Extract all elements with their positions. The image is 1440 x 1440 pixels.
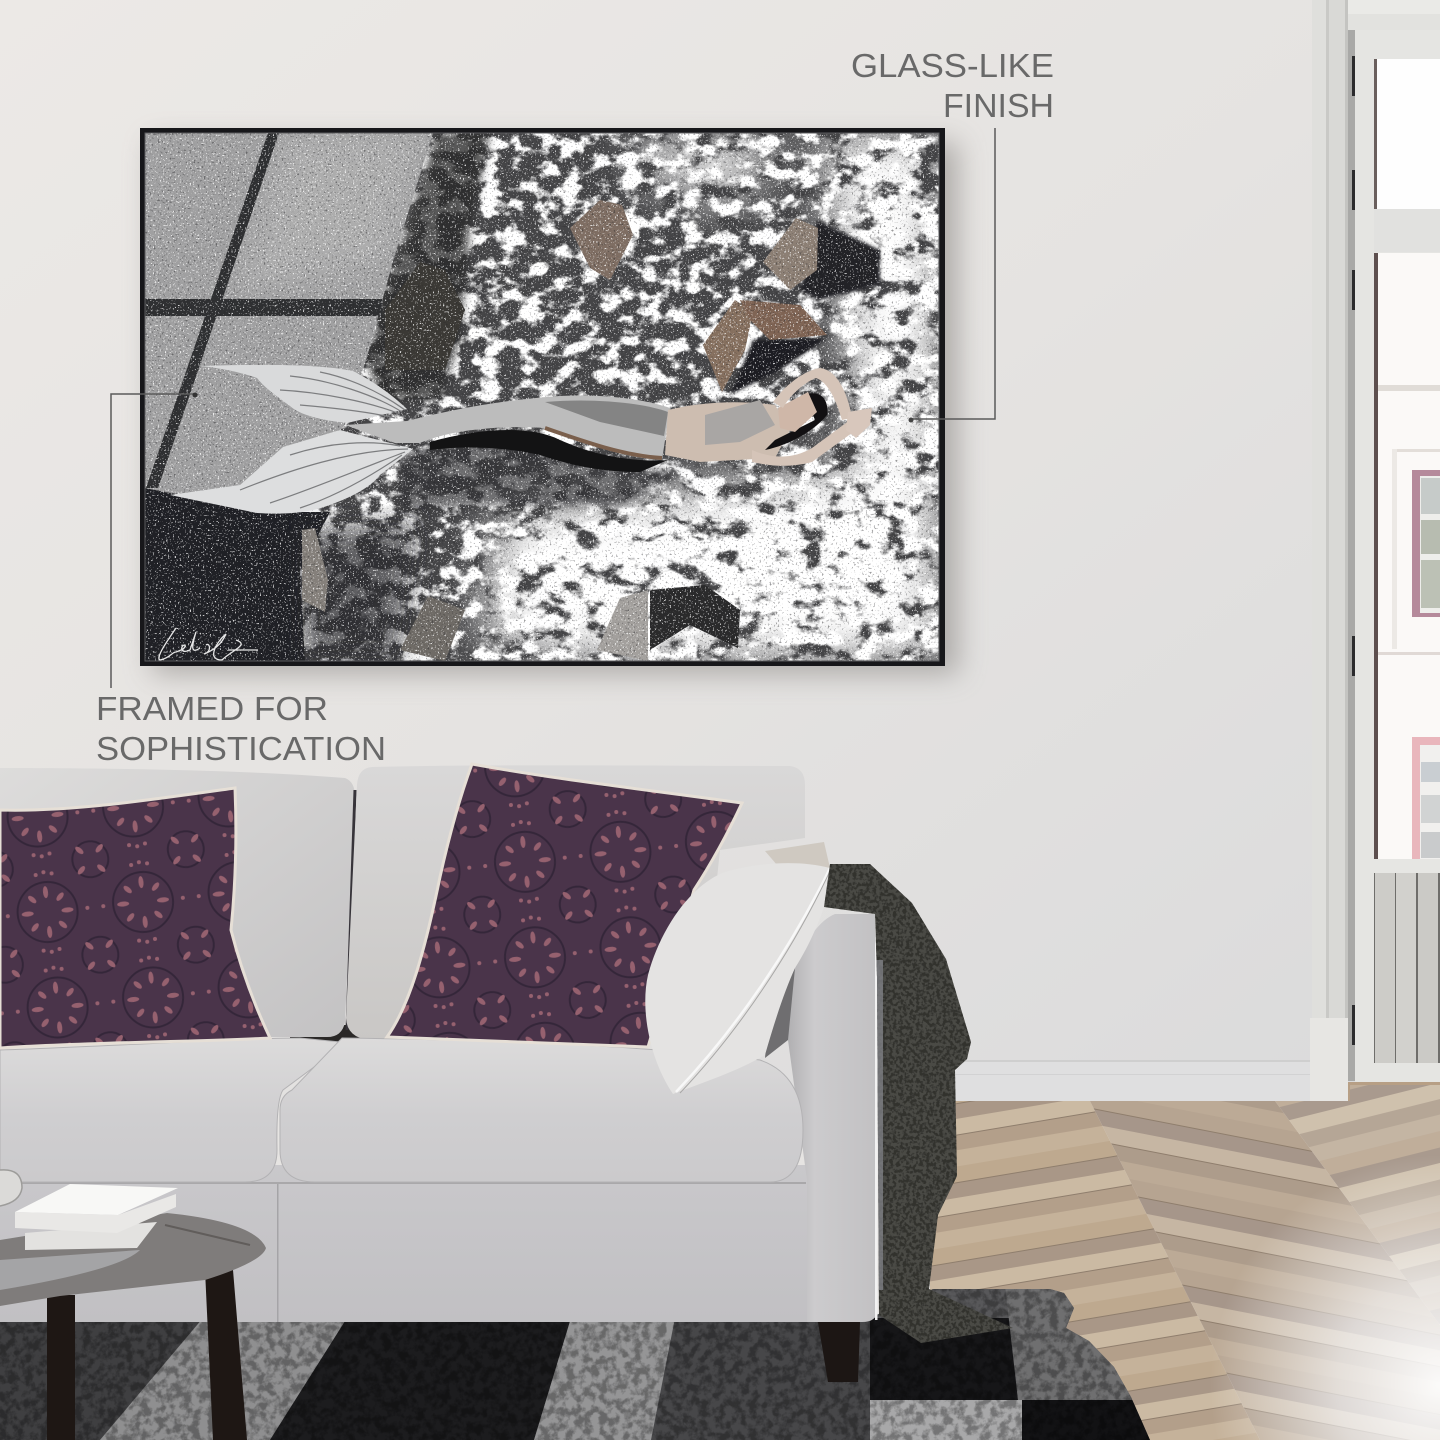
callout: glass-like finish: FINISH (943, 87, 1054, 124)
fine dark glitter (145, 133, 939, 661)
dark band under the tail (400, 440, 680, 510)
back cushion left (0, 768, 355, 1037)
lower arm (752, 420, 856, 466)
black frame (140, 128, 945, 666)
hand (846, 408, 872, 438)
callout: glass-like finish: GLASS-LIKE (851, 47, 1054, 84)
torso (665, 402, 790, 462)
door trim (1312, 0, 1348, 1040)
dark rocky mass (366, 133, 490, 400)
callout: glass-like finish (851, 47, 1054, 422)
sofa base (0, 1165, 810, 1322)
upper window pane (1374, 59, 1440, 209)
rocks (302, 200, 880, 661)
hinges (1352, 56, 1355, 1045)
striped rug (0, 1280, 1160, 1440)
marble table top (0, 1213, 266, 1306)
callout: framed for sophistication: SOPHISTICATION (96, 730, 386, 767)
mermaid tail (345, 396, 670, 472)
books (15, 1184, 178, 1250)
dark gap behind cushions (290, 1025, 400, 1055)
mermaid body (665, 368, 872, 466)
hair (765, 393, 827, 450)
baseboard (950, 1060, 1312, 1101)
herringbone wood floor (930, 1082, 1440, 1440)
mermaid tail fins (170, 365, 413, 514)
wall background (0, 0, 1440, 1110)
shadow between pillow and arm (765, 968, 795, 1058)
face (778, 392, 817, 432)
back cushion centre (346, 765, 805, 1040)
dark lower left water (145, 488, 330, 661)
coffee table with books (0, 1170, 266, 1440)
table legs (47, 1270, 247, 1440)
fine white glitter (145, 133, 939, 661)
purple pillow left (0, 788, 270, 1048)
callout: framed for sophistication (96, 392, 386, 767)
inner frame highlight (145, 133, 939, 661)
callout: framed for sophistication: FRAMED FOR (96, 690, 328, 727)
frame shadow (152, 142, 958, 674)
grey glittered upper left water (145, 133, 433, 509)
sparse sparkling blobs (145, 133, 939, 661)
sofa (0, 765, 878, 1382)
sofa arm (787, 914, 877, 1322)
framed mermaid artwork (140, 128, 958, 674)
dense white surf on the right (452, 134, 938, 660)
white pillow (645, 842, 830, 1094)
purple pillow centre (387, 764, 742, 1047)
seat cushion left (0, 1038, 341, 1182)
artist signature (159, 628, 258, 660)
lower wood door panel (1370, 859, 1440, 1063)
main window pane with building view (1374, 253, 1440, 859)
raised arm (773, 368, 852, 420)
seat cushion centre (280, 1038, 803, 1182)
knitted throw blanket (820, 860, 1020, 1350)
cushion gap (347, 790, 355, 1030)
sofa foot (818, 1322, 860, 1382)
glass (0, 1170, 22, 1206)
window reflection bars (145, 133, 382, 488)
window and door frame (1310, 0, 1440, 1101)
